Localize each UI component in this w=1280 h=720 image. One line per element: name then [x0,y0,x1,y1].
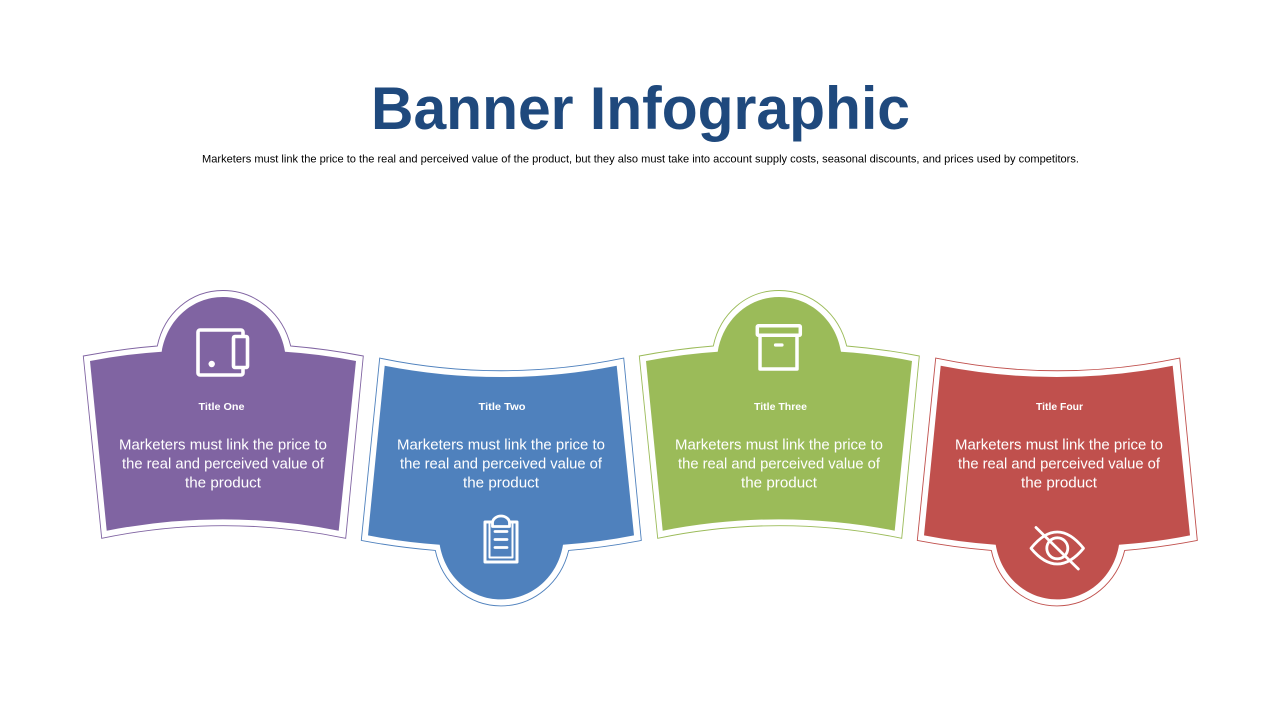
icon: crossed-out eye [1031,528,1084,569]
heading: title four: Title Four [1036,401,1083,413]
text block [675,438,883,492]
panel: title four [917,358,1197,606]
text block: the real and perceived value of [122,456,325,472]
icon: box [757,326,800,369]
green banner shape [639,290,919,538]
text block: Marketers must link the price to [119,438,327,454]
text block: Marketers must link the price to [397,438,605,454]
text block: the product [1021,476,1097,492]
subtitle: Marketers must link the price to the real and perceived value of the product, but they also must take into account supply costs, seasonal discounts, and prices used by competitors. [202,154,1079,166]
text block: Marketers must link the price to [955,438,1163,454]
text block [955,438,1163,492]
text block: the real and perceived value of [678,456,881,472]
red banner shape [917,358,1197,606]
panel: title three [639,290,919,538]
text block: the product [185,476,261,492]
text block [397,438,605,492]
text block [119,438,327,492]
text block: Marketers must link the price to [675,438,883,454]
icon: clipboard [485,516,517,562]
heading: title two: Title Two [478,401,526,413]
panel: title one [83,290,363,538]
blue banner shape [361,358,641,606]
text block: the product [463,476,539,492]
text block: the real and perceived value of [400,456,603,472]
text block: the product [741,476,817,492]
heading: title three: Title Three [754,401,807,413]
purple banner shape [83,290,363,538]
panel: title two [361,358,641,606]
icon: wallet [198,330,248,375]
heading: title one: Title One [198,401,245,413]
text block: the real and perceived value of [958,456,1161,472]
title: Banner Infographic [371,75,910,142]
